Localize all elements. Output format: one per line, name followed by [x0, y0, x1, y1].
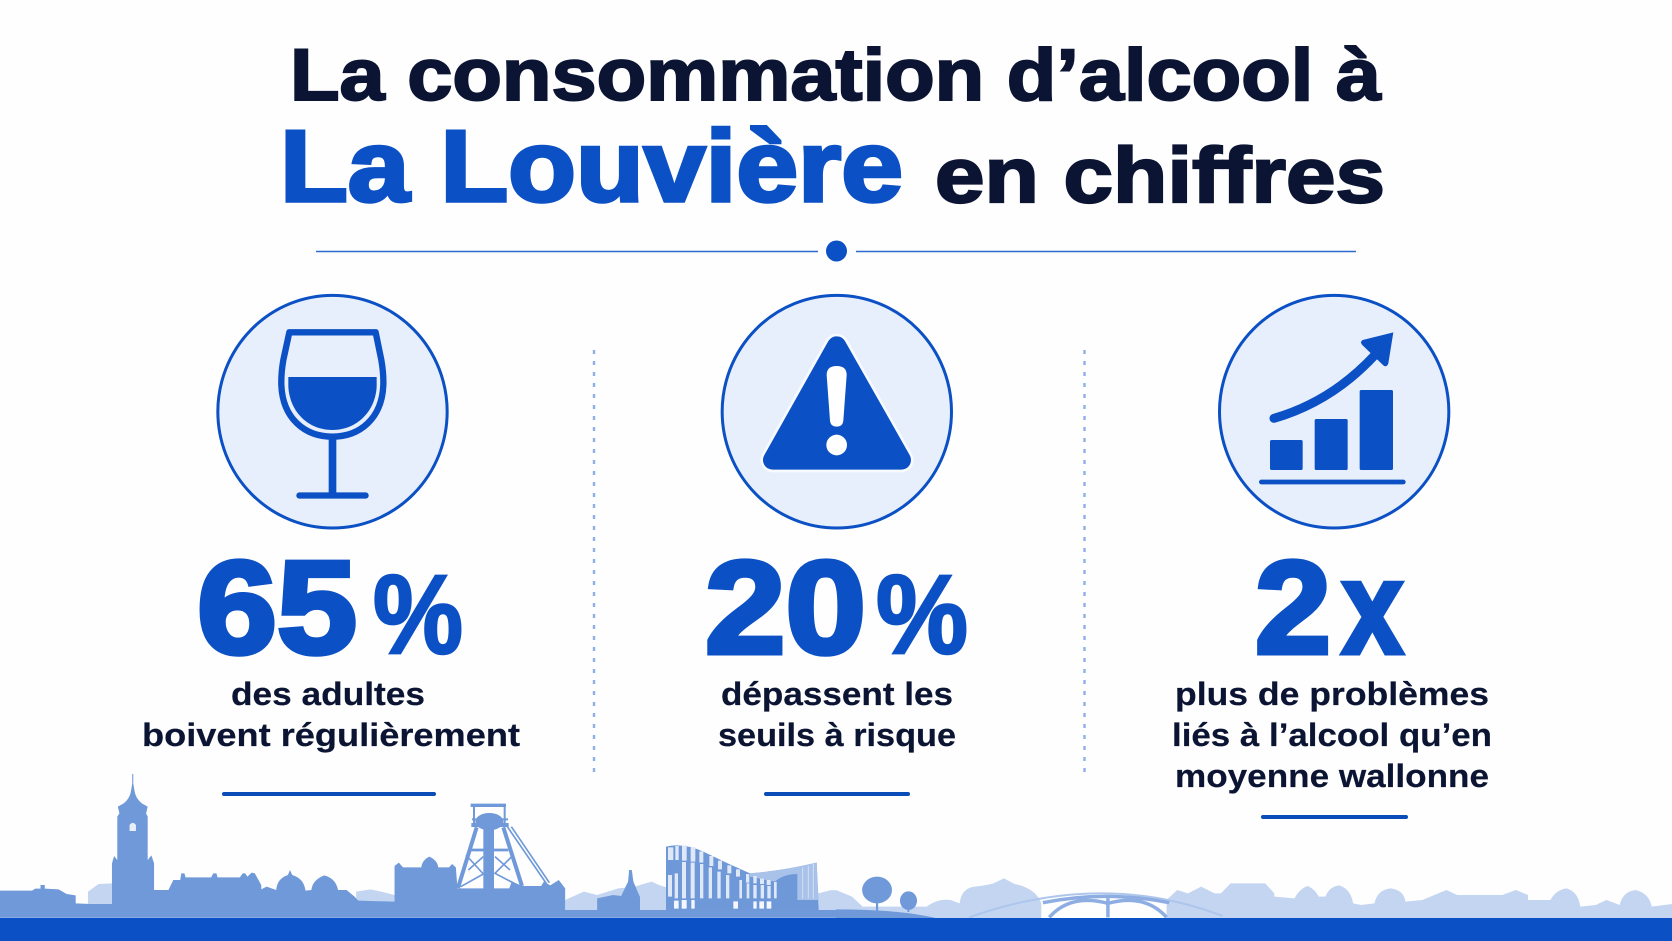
panel: 2x problèmes: [1172, 295, 1492, 819]
title: [280, 35, 1385, 223]
description: liés à l’alcool qu’en: [1172, 717, 1492, 753]
icon: warning triangle: [722, 295, 951, 528]
description: plus de problèmes: [1175, 676, 1489, 712]
stat: 20%: %: [876, 552, 968, 677]
description: [718, 676, 956, 753]
panel: 20% dépassent: [705, 295, 968, 796]
description: dépassent les: [721, 676, 953, 712]
stat: 20%: 20: [705, 534, 866, 681]
skyline: modern glass building: [640, 845, 840, 910]
stat: 2x: [1255, 534, 1403, 681]
panel: 65% des adultes: [142, 295, 520, 796]
title: La consommation d’alcool à: [290, 35, 1381, 116]
underline: [764, 792, 910, 796]
skyline: mine headframe: [458, 805, 549, 892]
icon: wine glass: [218, 295, 447, 528]
underline: [1261, 815, 1408, 819]
description: moyenne wallonne: [1175, 758, 1489, 794]
description: [142, 676, 520, 753]
trees: [836, 877, 937, 918]
icon: rising chart: [1219, 295, 1449, 528]
stat: 65%: 65: [197, 534, 357, 681]
stat: 2x: 2: [1255, 534, 1331, 681]
footer band: [0, 918, 1672, 941]
stat: 65%: %: [373, 552, 463, 677]
title: La Louvière: [280, 111, 903, 223]
skyline: left part: [0, 774, 836, 918]
bridge: [969, 893, 1223, 917]
column separators: [594, 350, 1084, 776]
skyline: [0, 774, 1672, 918]
stat: 65%: [197, 534, 463, 681]
stat: 20%: [705, 534, 968, 681]
description: [1172, 676, 1492, 794]
skyline: right part: [836, 877, 1672, 918]
title divider: [316, 240, 1356, 262]
description: des adultes: [231, 676, 425, 712]
stat: 2x: x: [1342, 534, 1403, 681]
description: boivent régulièrement: [142, 717, 520, 753]
description: seuils à risque: [718, 717, 956, 753]
underline: [222, 792, 436, 796]
title: en chiffres: [935, 131, 1385, 219]
